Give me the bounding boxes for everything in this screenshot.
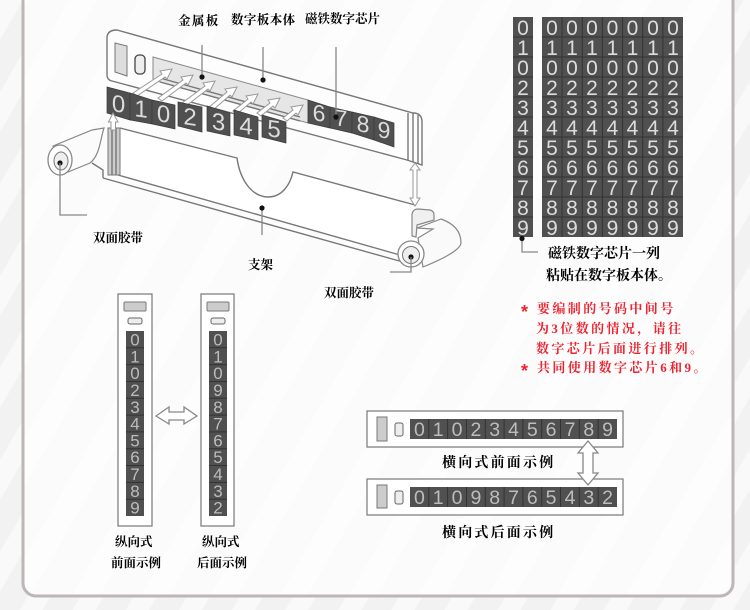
right tape roller xyxy=(398,209,461,267)
strip digits: 2 xyxy=(130,381,140,400)
strip digits: 3 xyxy=(213,482,223,501)
strip hole xyxy=(395,491,403,504)
strip digits: 9 xyxy=(130,499,140,518)
strip digits: 7 xyxy=(130,465,140,484)
front number chips: 2 xyxy=(183,103,197,132)
label: horizontal front: 横向式前面示例 xyxy=(442,454,555,471)
strip body xyxy=(118,294,152,526)
strip digits: 0 xyxy=(130,330,140,350)
front number chips: 0 xyxy=(112,90,125,119)
red notes: 数字芯片后面进行排列。 xyxy=(536,341,705,356)
strip body xyxy=(367,479,623,515)
front number chips: 4 xyxy=(239,112,253,141)
chip grid seven columns: 0000000 xyxy=(546,17,679,40)
chip column single: 2 xyxy=(517,77,529,100)
label: board body: 数字板本体 xyxy=(231,12,296,27)
number board body xyxy=(107,30,422,165)
chip column single: 1 xyxy=(517,37,529,60)
front number chips: 0 xyxy=(157,100,170,129)
chip grid seven columns: 0000000 xyxy=(546,57,679,80)
rear number chips: 7 xyxy=(335,104,347,132)
chip note: 磁铁数字芯片一列 xyxy=(548,245,660,262)
strip digits: 0 xyxy=(130,364,140,383)
label: metal plate: 金属板 xyxy=(178,13,220,28)
chip grid seven columns: 3333333 xyxy=(546,97,679,120)
front number chips xyxy=(107,87,286,144)
chip column single: 0 xyxy=(517,17,529,40)
strip digits: 5 xyxy=(213,448,223,467)
chip column single: 6 xyxy=(517,157,529,180)
chip grid seven columns: 6666666 xyxy=(546,157,679,180)
red notes: 共同使用数字芯片6和9。 xyxy=(537,360,709,375)
chip column single: 5 xyxy=(517,137,529,160)
label: vertical back xyxy=(197,534,248,570)
assembly arrow: left xyxy=(108,113,118,130)
board slot xyxy=(115,43,127,76)
strip digits: 1 xyxy=(130,347,140,366)
strip digits: 8 xyxy=(213,398,223,417)
chip leader line xyxy=(519,236,538,252)
rear number chips xyxy=(308,99,394,147)
strip digits xyxy=(209,330,227,518)
number chip sheet xyxy=(513,17,683,284)
chip note xyxy=(546,245,672,284)
chip column single: 7 xyxy=(517,177,529,200)
chip column single xyxy=(513,17,533,240)
red notes: 为3位数的情况，请往 xyxy=(536,321,684,337)
double arrow between horizontal examples xyxy=(578,441,598,485)
strip digits: 8 xyxy=(130,482,140,501)
strip digits: 4 xyxy=(213,465,223,484)
strip body xyxy=(367,411,623,447)
strip hole xyxy=(128,318,142,324)
exploded product diagram xyxy=(48,11,461,300)
strip digits: 01023456789 xyxy=(414,419,613,441)
assembly arrow: right xyxy=(410,163,420,206)
vertical front example xyxy=(118,294,152,526)
label: vertical back: 后面示例 xyxy=(197,555,248,570)
strip digits: 3 xyxy=(130,398,140,417)
label: vertical front: 前面示例 xyxy=(111,555,162,570)
red notes: * xyxy=(521,302,528,322)
strip digits: 0 xyxy=(213,364,223,383)
label: vertical back: 纵向式 xyxy=(202,534,240,549)
board oval hole xyxy=(135,55,145,74)
chip grid seven columns: 8888888 xyxy=(546,197,679,220)
arrows from chips to plate xyxy=(133,69,303,121)
horizontal back example xyxy=(367,479,623,515)
strip digits: 01098765432 xyxy=(414,487,613,509)
strip digits: 1 xyxy=(213,347,223,366)
chip column single: 4 xyxy=(517,117,529,140)
label: vertical front xyxy=(111,534,162,570)
label: tape right: 双面胶带 xyxy=(324,285,375,300)
chip grid seven columns: 1111111 xyxy=(546,37,679,60)
strip digits: 7 xyxy=(213,415,223,434)
red notes xyxy=(521,301,709,381)
support stand xyxy=(92,128,415,262)
chip grid seven columns: 2222222 xyxy=(546,77,679,100)
strip body xyxy=(201,294,234,526)
strip digits: 6 xyxy=(213,431,223,450)
left tape roller xyxy=(48,128,104,175)
vertical back example xyxy=(201,294,234,526)
label: horizontal back: 横向式后面示例 xyxy=(442,524,555,541)
strip hole xyxy=(395,423,403,436)
strip slot xyxy=(377,485,387,508)
strip digits: 6 xyxy=(130,448,140,467)
chip grid seven columns xyxy=(542,17,683,240)
strip slot xyxy=(124,302,146,311)
chip grid seven columns: 4444444 xyxy=(546,117,679,140)
double arrow between vertical examples xyxy=(156,407,197,424)
front number chips: 5 xyxy=(267,115,281,144)
strip slot xyxy=(207,302,229,311)
rear number chips: 6 xyxy=(313,99,325,127)
strip slot xyxy=(377,417,387,441)
metal plate xyxy=(153,57,308,123)
strip digits: 2 xyxy=(213,499,223,518)
chip grid seven columns: 9999999 xyxy=(546,217,679,240)
chip column single: 8 xyxy=(517,197,529,220)
chip column single: 9 xyxy=(517,217,529,240)
label: vertical front: 纵向式 xyxy=(115,534,153,549)
chip grid seven columns: 5555555 xyxy=(546,137,679,160)
rear number chips: 9 xyxy=(378,116,390,144)
chip column single: 3 xyxy=(517,97,529,120)
front number chips: 3 xyxy=(212,108,225,137)
chip column single: 0 xyxy=(517,57,529,80)
label: tape left: 双面胶带 xyxy=(93,230,144,245)
strip digits: 0 xyxy=(213,330,223,350)
front number chips: 1 xyxy=(134,95,148,124)
chip note: 粘贴在数字板本体。 xyxy=(546,267,672,284)
strip digits: 9 xyxy=(213,381,223,400)
leader lines xyxy=(60,45,411,272)
chip grid seven columns: 7777777 xyxy=(546,177,679,200)
strip digits xyxy=(126,330,144,518)
label: stand: 支架 xyxy=(248,257,274,272)
red notes: 要编制的号码中间号 xyxy=(537,301,676,316)
strip digits: 4 xyxy=(130,415,140,434)
red notes: * xyxy=(521,361,528,381)
horizontal front example xyxy=(367,411,623,447)
rear number chips: 8 xyxy=(357,110,369,138)
strip digits: 5 xyxy=(130,431,140,450)
label: magnetic chips: 磁铁数字芯片 xyxy=(305,11,381,26)
strip hole xyxy=(211,318,225,324)
